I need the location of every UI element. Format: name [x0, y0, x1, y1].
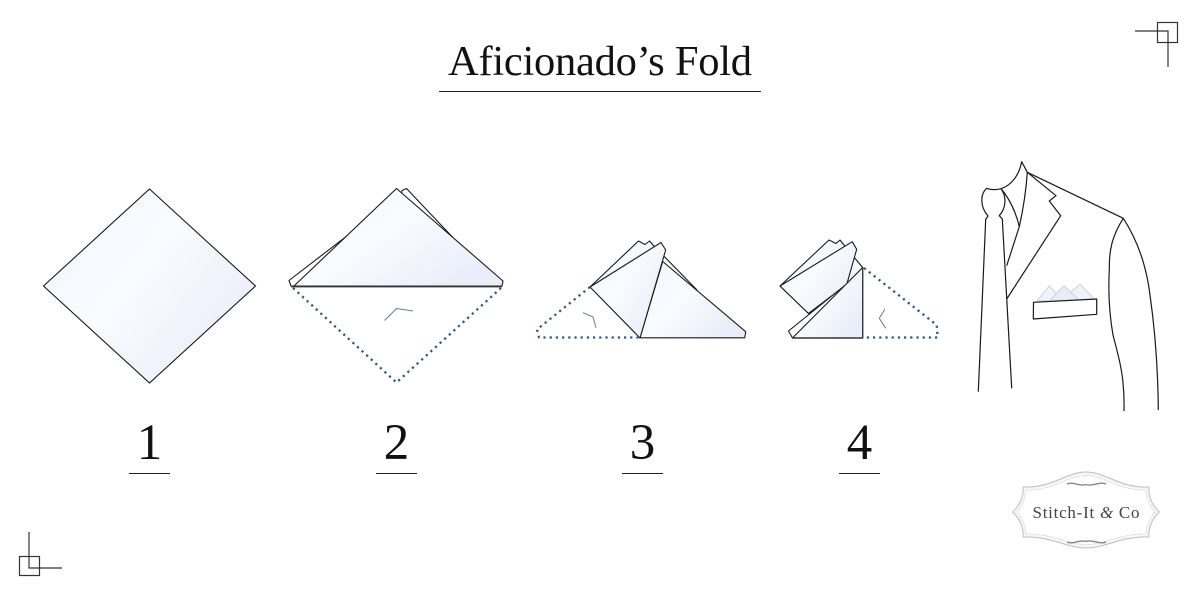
number 3 — [622, 415, 663, 474]
back layers of cloth — [289, 188, 460, 286]
number 1 — [129, 415, 170, 474]
lapel — [1007, 172, 1061, 299]
bottom flourish — [1067, 541, 1106, 543]
pocket — [1033, 299, 1097, 319]
number 4: 4 — [847, 415, 872, 471]
collar and shoulder — [1001, 162, 1123, 218]
fold arrow — [879, 309, 886, 328]
step 4: right corner folded up — [780, 240, 938, 338]
number 2: 2 — [384, 415, 409, 471]
dotted outline — [864, 268, 938, 338]
step 1: flat square diamond — [44, 189, 256, 383]
step numbers — [129, 415, 880, 474]
sleeve — [1109, 218, 1124, 411]
pocket square peaks — [1037, 284, 1094, 301]
dotted outline of folded part — [293, 288, 501, 382]
back layers — [780, 240, 863, 314]
right triangle — [640, 262, 746, 338]
fold arrow — [384, 308, 413, 320]
brand name: Stitch-It & Co — [1032, 503, 1140, 522]
jacket illustration — [978, 162, 1158, 411]
brand logo plaque — [1013, 472, 1159, 548]
front triangle — [294, 188, 503, 286]
tie — [978, 188, 1001, 392]
step 2: folded in half — [289, 188, 503, 382]
number 4 — [839, 415, 880, 474]
step 3: left corner folded up — [537, 241, 746, 338]
folded right corner — [788, 271, 863, 338]
back layers — [590, 241, 697, 300]
fold arrow — [583, 313, 596, 328]
number 1: 1 — [137, 415, 162, 471]
number 2 — [376, 415, 417, 474]
corner ornament: bottom left — [20, 532, 62, 576]
title: Aficionado’s Fold — [448, 38, 752, 85]
dotted outline — [537, 287, 640, 338]
front flap — [780, 242, 857, 314]
corner ornament: top right — [1135, 22, 1178, 67]
number 3: 3 — [630, 415, 655, 471]
front flap — [590, 242, 666, 338]
top flourish — [1067, 483, 1106, 485]
